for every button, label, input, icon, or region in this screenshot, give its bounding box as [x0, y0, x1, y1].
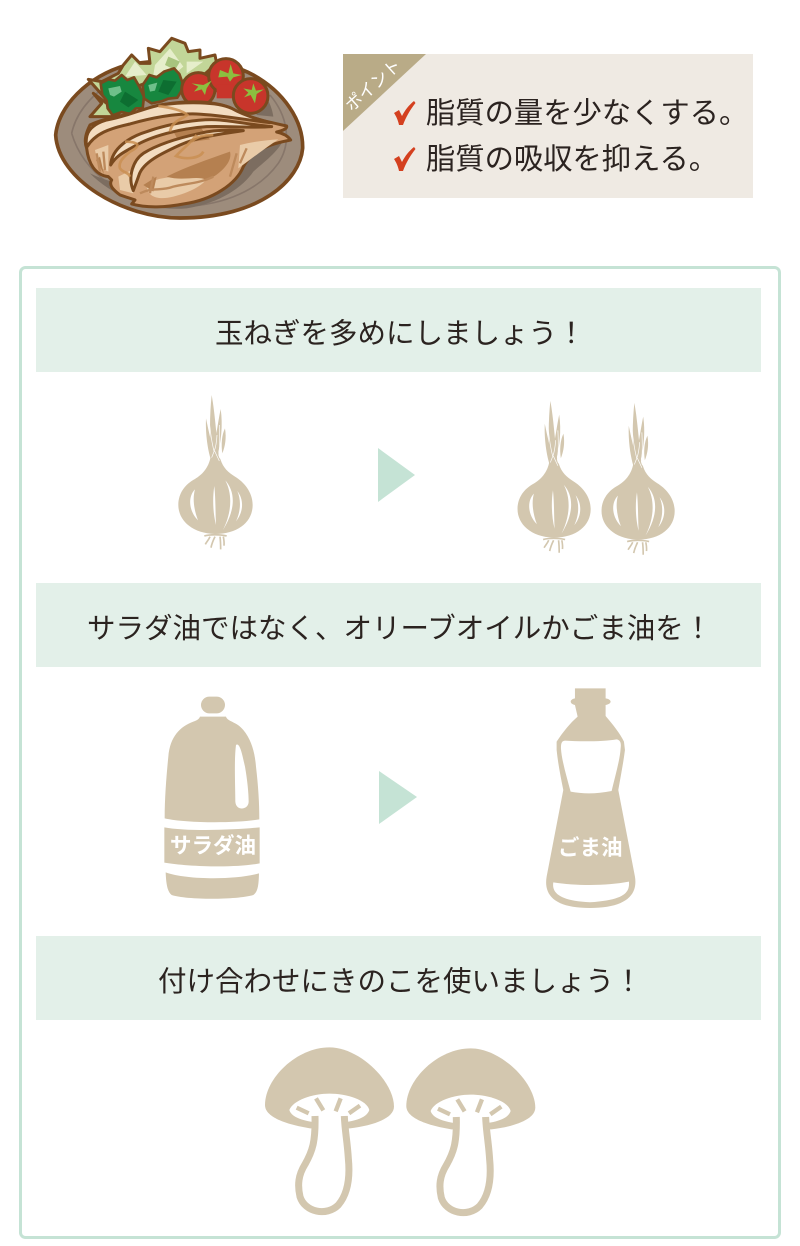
lettuce [88, 38, 217, 117]
plate [56, 61, 303, 218]
point text 2: 脂質の吸収を抑える。 [426, 143, 718, 176]
panel: tips [20, 268, 780, 1238]
ribbon label: ポイント [342, 56, 405, 115]
icon: check mark 1 [394, 101, 416, 125]
pork slices [85, 102, 291, 207]
corner ribbon [343, 54, 426, 131]
heading band: mushrooms [36, 936, 761, 1020]
panel: point box [342, 54, 753, 198]
heading band: mushrooms: 付け合わせにきのこを使いましょう！ [158, 966, 643, 998]
icon: mushrooms [265, 1047, 535, 1213]
arrow: onion [378, 448, 415, 502]
icon: two onions [518, 401, 675, 555]
icon: sesame oil bottle [546, 688, 635, 908]
icon: salad oil bottle: サラダ油 [170, 833, 256, 858]
icon: one onion [178, 395, 253, 549]
arrow: oil [379, 771, 417, 824]
heading band: onion [36, 288, 761, 372]
heading band: onion: 玉ねぎを多めにしましょう！ [215, 318, 586, 350]
icon: salad oil bottle [164, 697, 260, 899]
broccoli [101, 68, 184, 115]
icon: sesame oil bottle: ごま油 [558, 835, 623, 860]
tomatoes [182, 59, 268, 113]
illustration: ginger pork plate [56, 38, 303, 218]
icon: check mark 2 [394, 147, 416, 171]
point text 1: 脂質の量を少なくする。 [426, 97, 748, 130]
heading band: oil [36, 583, 761, 667]
heading band: oil: サラダ油ではなく、オリーブオイルかごま油を！ [87, 613, 712, 645]
